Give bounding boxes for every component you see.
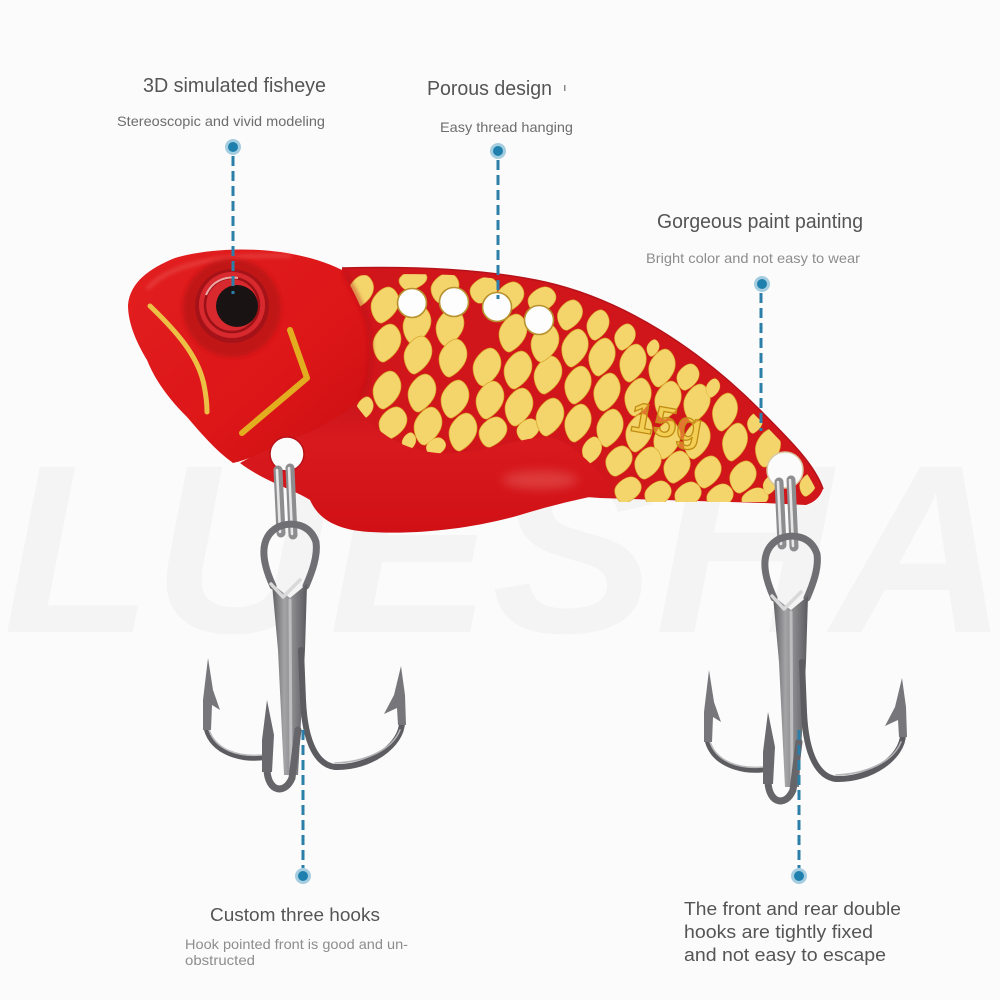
belly (240, 395, 612, 533)
dashed leader (302, 730, 304, 868)
porous holes (398, 288, 554, 334)
description (684, 898, 901, 965)
callout: fisheye (117, 75, 326, 294)
watermark text: LUESHA (3, 415, 1000, 683)
front hook hole (270, 437, 304, 471)
callout: double hooks (684, 730, 901, 965)
dashed leader (798, 730, 800, 868)
callout: three hooks (185, 730, 408, 968)
callout: paint (646, 211, 863, 431)
head rim shading (344, 272, 371, 396)
marker dot (754, 276, 770, 292)
description: Stereoscopic and vivid modeling (117, 113, 325, 129)
description: The front and rear double (684, 898, 901, 919)
weight mark: 15g (627, 393, 706, 452)
back panel with scales (335, 268, 823, 510)
heading: 3D simulated fisheye (143, 75, 326, 97)
eye (183, 259, 281, 357)
marker dot (295, 868, 311, 884)
callout: three hooks: obstructed (185, 952, 255, 968)
heading: Gorgeous paint painting (657, 211, 863, 233)
marker dot (490, 143, 506, 159)
heading: Porous design (427, 78, 552, 100)
marker dot (791, 868, 807, 884)
description: Easy thread hanging (440, 119, 573, 135)
rear hook hole (767, 452, 803, 488)
head (128, 249, 370, 463)
belly highlight (502, 471, 578, 489)
lure body (128, 249, 823, 533)
description: and not easy to escape (684, 944, 886, 965)
front treble hook (203, 468, 406, 789)
rear treble hook (704, 480, 907, 801)
head highlight (148, 256, 290, 288)
stray tick (564, 85, 566, 91)
description: Hook pointed front is good and un- (185, 936, 408, 952)
description: Bright color and not easy to wear (646, 250, 860, 266)
callout: porous design (427, 78, 573, 299)
gold stripe: fin (242, 330, 307, 433)
dashed leader (760, 293, 762, 431)
marker dot (225, 139, 241, 155)
description: hooks are tightly fixed (684, 921, 873, 942)
dashed leader (496, 160, 500, 299)
heading: Custom three hooks (210, 905, 380, 925)
gold stripe: gill (150, 306, 207, 412)
dashed leader (232, 156, 234, 294)
